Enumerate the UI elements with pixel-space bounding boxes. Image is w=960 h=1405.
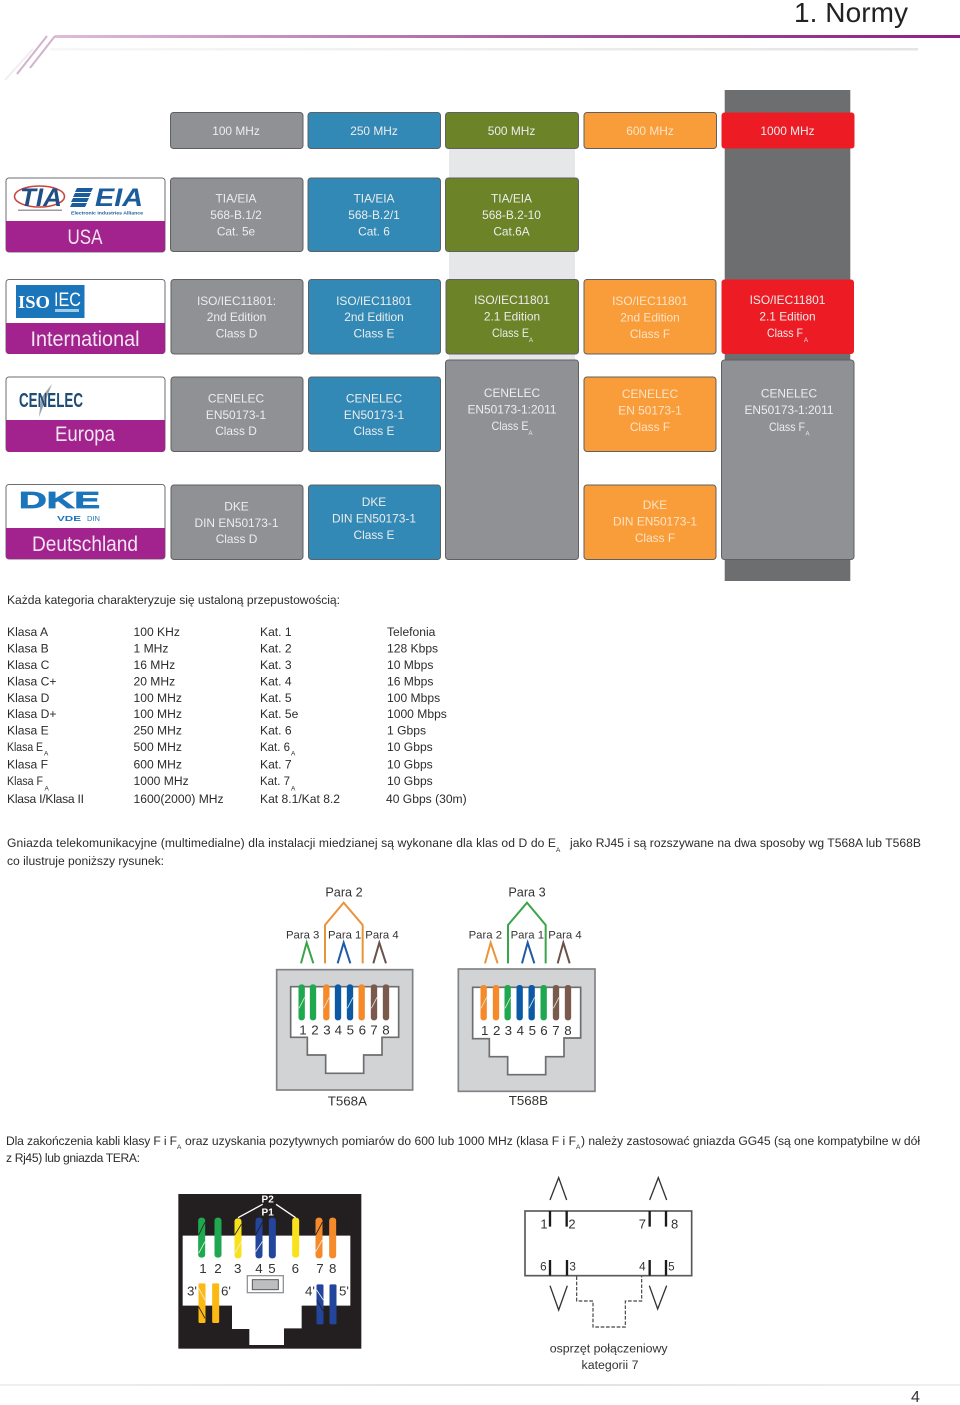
diagram: T568B: Para 1 [511, 929, 544, 941]
cell: Class E: CENELEC [346, 392, 402, 406]
diagram: GG45 socket: 3' [187, 1284, 197, 1299]
diagram: T568A: 2 [311, 1022, 319, 1037]
cell: Cat.6A: 568-B.2-10 [482, 208, 541, 222]
diagram: T568A: Para 2 [325, 886, 363, 900]
column: przepustowość: 40 Gbps (30m) [386, 792, 467, 806]
cell: Class E: Class E [354, 326, 395, 340]
cell: Class E: DKE [362, 495, 386, 509]
column: kategoria: Kat 8.1/Kat 8.2 [260, 792, 340, 806]
cell: Class F: ISO/IEC11801 [612, 294, 688, 308]
cell: Class F: Class F [630, 420, 670, 434]
header: 600 MHz: 600 MHz [626, 124, 674, 138]
header: 1000 MHz [722, 112, 854, 148]
header: 250 MHz [308, 112, 440, 148]
header: 600 MHz [584, 112, 716, 148]
page header [5, 0, 960, 80]
diagram: T568B: Para 3 [508, 886, 546, 900]
column: klasa: Klasa E [7, 724, 49, 738]
column: pasmo: 1000 MHz [134, 774, 189, 788]
diagram: T568B: T568B [509, 1093, 548, 1108]
cell: Class EA: Class E [492, 326, 529, 340]
logo panel: Deutschland [6, 484, 165, 559]
diagram: T568A: 5 [347, 1022, 354, 1037]
column: kategoria: Kat. 6 [260, 724, 292, 738]
column: przepustowość: 16 Mbps [387, 674, 433, 688]
column: przepustowość [386, 625, 467, 806]
paragraph: GG45 / TERA [6, 1134, 920, 1165]
logo panel: Europa: CENELEC [19, 390, 83, 412]
diagram: GG45 socket: 1 [199, 1261, 207, 1276]
column: przepustowość: Telefonia [387, 625, 436, 639]
cell: Cat.6A: TIA/EIA [491, 192, 532, 206]
cell: Class E: Class E [354, 528, 395, 542]
column: przepustowość: 10 Gbps [387, 774, 433, 788]
cell: Cat. 6: 568-B.2/1 [348, 208, 400, 222]
row: USA [6, 178, 578, 252]
cell: Class E: Class E [354, 424, 395, 438]
column: klasa: Klasa E [7, 740, 43, 754]
column: pasmo: 250 MHz [134, 724, 182, 738]
cell: Class EA [446, 280, 578, 354]
diagram: GG45 socket: 4 [255, 1261, 263, 1276]
column: przepustowość: 1 Gbps [387, 724, 426, 738]
diagram: T568B: 7 [552, 1023, 560, 1038]
diagram: category 7 connector: 4 [639, 1260, 646, 1273]
cell: Class F [584, 377, 716, 452]
cell: Class D: Class D [216, 532, 258, 546]
cell: Cat. 5e: Cat. 5e [217, 224, 256, 238]
column: klasa [7, 625, 84, 806]
diagram: category 7 connector: 6 [540, 1260, 547, 1273]
column: klasa: Klasa C+ [7, 674, 56, 688]
paragraph: GG45 / TERA: z Rj45) lub gniazda TERA: [6, 1151, 140, 1165]
diagram: category 7 connector: 1 [540, 1217, 548, 1232]
column: kategoria: A [291, 786, 296, 792]
paragraph: GG45 / TERA: ) należy zastosować gniazda GG45 (są one kompatybilne w dół [581, 1134, 920, 1148]
diagram: T568A: Para 1 [328, 929, 361, 941]
column: kategoria: Kat. 7 [260, 774, 290, 788]
column: kategoria: Kat. 3 [260, 658, 292, 672]
column: pasmo [134, 625, 224, 806]
logo panel: Deutschland: VDE [57, 514, 81, 523]
column: klasa: Klasa A [7, 625, 49, 639]
logo panel: International: International [30, 328, 140, 351]
logo panel: USA [6, 178, 165, 252]
column: klasa: Klasa D [7, 691, 50, 705]
diagram: T568A: Para 3 [286, 929, 319, 941]
cell: Class D: EN50173-1 [206, 408, 266, 422]
cell: Class D: Class D [216, 326, 258, 340]
logo panel: Europa [6, 377, 165, 452]
cell: Class D: DIN EN50173-1 [195, 516, 279, 530]
column: klasa: Klasa D+ [7, 707, 56, 721]
column: pasmo: 100 MHz [134, 691, 182, 705]
diagram: T568B: 3 [505, 1023, 512, 1038]
header: 500 MHz [446, 112, 578, 148]
diagram: GG45 socket: 8 [329, 1261, 336, 1276]
diagram: T568A: 4 [335, 1022, 343, 1037]
cell: Class F: CENELEC [622, 387, 678, 401]
cell: Class E: ISO/IEC11801 [336, 294, 412, 308]
diagram: T568B: 4 [517, 1023, 525, 1038]
cell: Class F [584, 280, 716, 354]
diagram: T568A: T568A [328, 1094, 367, 1109]
diagram: T568A: 1 [299, 1022, 307, 1037]
cell: Class D: Class D [215, 424, 257, 438]
cell: Class F: DKE [643, 498, 667, 512]
cell: Class EA (tall): CENELEC [484, 386, 540, 400]
diagram: GG45 socket: 5' [339, 1284, 349, 1299]
column: klasa: A [44, 786, 50, 792]
diagram: GG45 socket: 2 [214, 1261, 222, 1276]
logo panel: USA: EIA [95, 184, 143, 212]
cell: Class FA (tall): Class F [769, 420, 805, 434]
column: przepustowość: 10 Gbps [387, 758, 433, 772]
cell: Class E [308, 485, 440, 560]
header: 100 MHz: 100 MHz [212, 124, 260, 138]
cell: Class E [308, 377, 440, 452]
row: Deutschland [6, 484, 716, 560]
paragraph: gniazda: Gniazda telekomunikacyjne (multimedialne) dla instalacji miedzianej są wykonane dla klas od D do E [7, 836, 556, 850]
cell: Class FA: ISO/IEC11801 [750, 293, 826, 307]
column: kategoria: A [291, 750, 296, 758]
cell: Class EA: ISO/IEC11801 [474, 293, 550, 307]
logo panel: USA: USA [68, 226, 102, 249]
cell: Class E: DIN EN50173-1 [332, 512, 416, 526]
column: pasmo: 100 MHz [134, 707, 182, 721]
diagram: GG45 socket [178, 1194, 361, 1349]
cell: Class FA: A [804, 338, 808, 344]
column: klasa: Klasa F [7, 758, 48, 772]
cell: Class D [171, 280, 303, 354]
column: pasmo: 500 MHz [134, 740, 182, 754]
cell: Class EA (tall): EN50173-1:2011 [467, 402, 557, 416]
paragraph: gniazda [7, 836, 921, 868]
wiring diagrams T568A and T568B [277, 886, 595, 1109]
cell: Class FA (tall): CENELEC [761, 386, 817, 400]
diagram: GG45 socket: 6' [221, 1284, 231, 1299]
column: klasa: Klasa C [7, 658, 50, 672]
diagram: T568B: Para 4 [548, 929, 582, 941]
diagram: T568B: 5 [529, 1023, 536, 1038]
row: International [6, 280, 854, 354]
cell: Cat. 5e: 568-B.1/2 [210, 208, 262, 222]
cell: Class EA (tall) [446, 360, 578, 560]
diagram: GG45 socket: 3 [234, 1261, 241, 1276]
paragraph: gniazda: A [556, 847, 561, 854]
diagram: T568A: 7 [370, 1022, 378, 1037]
header: 500 MHz: 500 MHz [488, 124, 535, 138]
column: kategoria: Kat. 1 [260, 625, 292, 639]
diagram: category 7 connector: 7 [639, 1217, 646, 1232]
paragraph: GG45 / TERA: A [177, 1144, 182, 1151]
cell: Class FA [722, 280, 854, 354]
cell: Class D: 2nd Edition [207, 310, 266, 324]
header: 250 MHz: 250 MHz [350, 124, 398, 138]
diagram: GG45 socket: 6 [292, 1261, 299, 1276]
cell: Class D [171, 377, 303, 452]
logo panel: International: ISO [18, 292, 50, 312]
diagram: T568B: 6 [540, 1023, 548, 1038]
cell: Class EA (tall): Class E [492, 419, 529, 433]
diagram: GG45 socket: P1 [262, 1208, 274, 1219]
paragraph: GG45 / TERA: Dla zakończenia kabli klasy F i F [6, 1134, 177, 1148]
paragraph: gniazda: co ilustruje poniższy rysunek: [7, 854, 164, 868]
diagram: T568B: 2 [493, 1023, 500, 1038]
column: przepustowość: 128 Kbps [387, 642, 438, 656]
diagram: category 7 connector: 8 [671, 1217, 678, 1232]
cell: Class F: 2nd Edition [620, 310, 680, 324]
cell: Class E: 2nd Edition [344, 310, 404, 324]
column: pasmo: 600 MHz [134, 758, 182, 772]
cell: Class FA (tall) [722, 360, 854, 560]
column: kategoria: Kat. 5 [260, 691, 292, 705]
column: klasa: A [44, 750, 49, 758]
column: pasmo: 100 KHz [134, 625, 180, 639]
logo panel: USA: Electronic Industries Alliance [71, 210, 143, 216]
diagram: T568A: 3 [323, 1022, 331, 1037]
cell: Class F: DIN EN50173-1 [613, 514, 697, 528]
cell: Cat. 6 [308, 178, 440, 252]
column background bands [449, 90, 850, 581]
column: przepustowość: 1000 Mbps [387, 707, 447, 721]
cell: Cat. 6: TIA/EIA [354, 192, 395, 206]
diagram: T568A [277, 886, 413, 1109]
logo panel: Deutschland: DKE [19, 487, 100, 513]
cell: Class FA (tall): EN50173-1:2011 [744, 403, 834, 417]
cell: Class D: CENELEC [208, 392, 264, 406]
paragraph: GG45 / TERA: oraz uzyskania pozytywnych pomiarów do 600 lub 1000 MHz (klasa F i F [185, 1134, 576, 1148]
diagram: category 7 connector: 3 [569, 1260, 576, 1273]
cell: Class F: Class F [630, 327, 670, 341]
header: 1000 MHz: 1000 MHz [760, 124, 815, 138]
column: kategoria: Kat. 2 [260, 642, 292, 656]
diagram: category 7 connector: 5 [668, 1260, 675, 1273]
diagram: T568B [458, 886, 595, 1108]
diagram: category 7 connector: osprzęt połączeniowy [550, 1341, 668, 1355]
diagram: GG45 socket: 4' [305, 1284, 315, 1299]
cell: Class D: ISO/IEC11801: [197, 294, 276, 308]
column: przepustowość: 10 Gbps [387, 740, 433, 754]
table: classes and categories [7, 625, 467, 806]
cell: Class EA: 2.1 Edition [484, 310, 540, 324]
cell: Class FA: 2.1 Edition [759, 310, 816, 324]
logo panel: Deutschland: DIN [87, 514, 100, 523]
column: kategoria: Kat. 4 [260, 674, 292, 688]
column: kategoria: Kat. 6 [260, 740, 290, 754]
logo panel: International: IEC [54, 290, 81, 311]
column: klasa: Klasa B [7, 642, 49, 656]
paragraph: gniazda: jako RJ45 i są rozszywane na dwa sposoby wg T568A lub T568B [569, 836, 921, 850]
diagram: GG45 socket: 7 [316, 1261, 324, 1276]
cell: Cat. 6: Cat. 6 [358, 224, 390, 238]
diagram: category 7 connector: kategorii 7 [582, 1358, 639, 1372]
diagram: T568B: 8 [564, 1023, 572, 1038]
cell: Cat. 5e [170, 178, 303, 252]
diagram: T568B: 1 [481, 1023, 488, 1038]
diagram: T568B: Para 2 [469, 929, 502, 941]
cell: Cat.6A [446, 178, 578, 252]
paragraph: GG45 / TERA: A [576, 1144, 581, 1151]
diagram: T568A: Para 4 [365, 929, 399, 941]
column: klasa: Klasa F [7, 774, 43, 788]
header: 100 MHz [170, 112, 303, 148]
cell: Cat.6A: Cat.6A [493, 224, 530, 238]
cell: Class D: DKE [224, 500, 249, 514]
cell: Class EA: A [529, 338, 533, 344]
column: kategoria [260, 625, 340, 806]
diagram: category 7 connector: 2 [568, 1217, 576, 1232]
column: pasmo: 1 MHz [134, 642, 168, 656]
column: pasmo: 20 MHz [134, 674, 175, 688]
column: klasa: Klasa I/Klasa II [7, 792, 84, 806]
diagram: T568A: 6 [359, 1022, 366, 1037]
cell: Class E: EN50173-1 [344, 408, 404, 422]
column: kategoria: Kat. 5e [260, 707, 299, 721]
cell: Cat. 5e: TIA/EIA [216, 192, 257, 206]
logo panel: Europa: Europa [55, 423, 115, 446]
column: pasmo: 1600(2000) MHz [134, 792, 224, 806]
cell: Class FA: Class F [767, 326, 803, 340]
frequency header row [170, 112, 854, 148]
diagram: category 7 connector [525, 1178, 692, 1372]
cell: Class F: EN 50173-1 [618, 404, 682, 418]
cell: Class F: Class F [635, 531, 675, 545]
column: przepustowość: 100 Mbps [387, 691, 440, 705]
diagram: GG45 socket: P2 [262, 1195, 274, 1206]
logo panel: International [6, 280, 165, 354]
cell: Class FA (tall): A [806, 432, 810, 438]
cell: Class D [171, 485, 303, 560]
cell: Class F [584, 485, 716, 560]
diagram: GG45 socket: 5 [268, 1261, 276, 1276]
cell: Class EA (tall): A [528, 431, 533, 437]
column: kategoria: Kat. 7 [260, 758, 292, 772]
diagram: T568A: 8 [382, 1022, 390, 1037]
cell: Class E [308, 280, 440, 354]
intro sentence: Każda kategoria charakteryzuje się ustaloną przepustowością: [7, 593, 340, 607]
row: Europa [6, 360, 854, 560]
column: pasmo: 16 MHz [134, 658, 175, 672]
column: przepustowość: 10 Mbps [387, 658, 433, 672]
logo panel: USA: TIA [20, 184, 62, 212]
logo panel: Deutschland: Deutschland [32, 533, 138, 556]
